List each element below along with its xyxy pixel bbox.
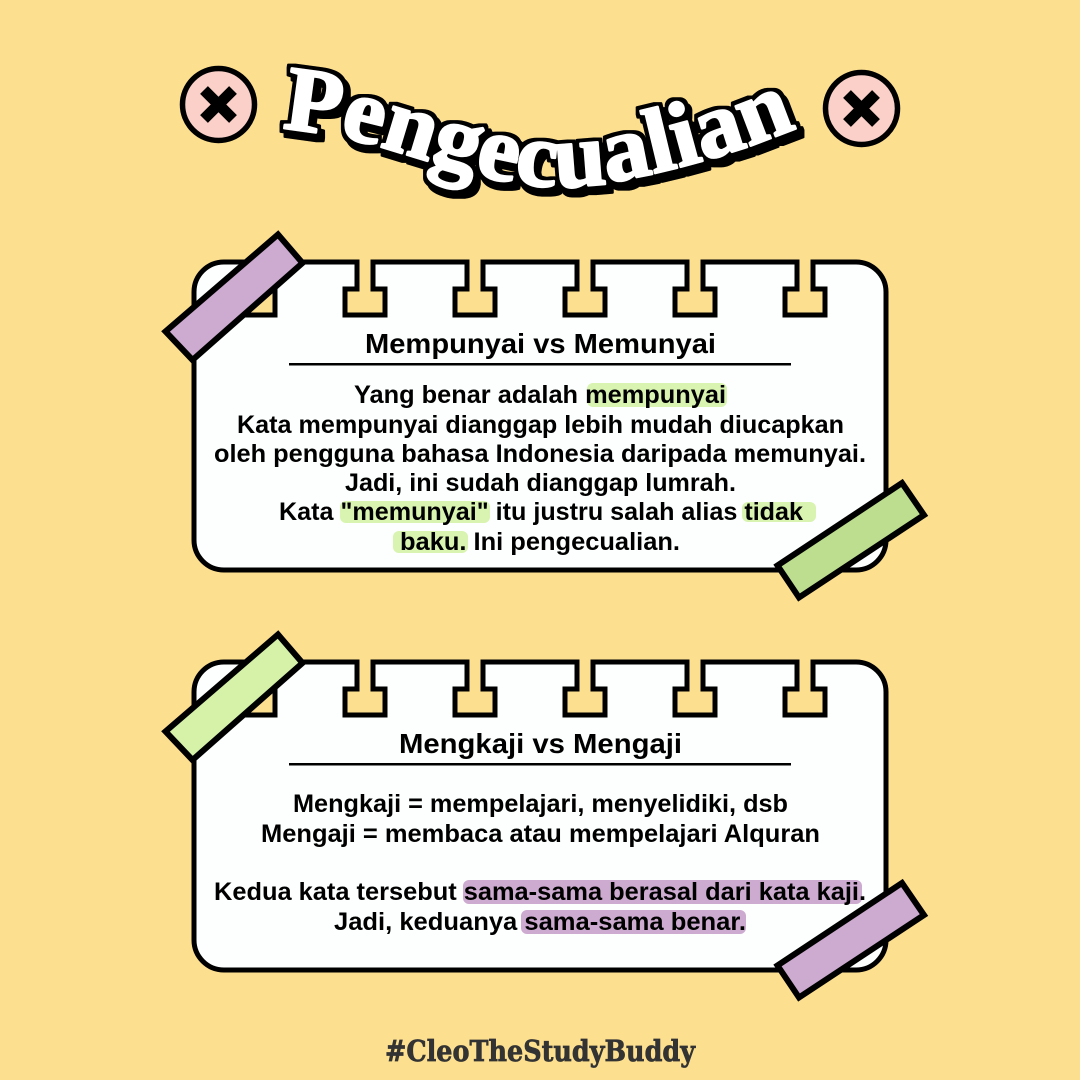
hashtag footer: #CleoTheStudyBuddy [385,1034,696,1068]
body text: Jadi, ini sudah dianggap lumrah. [345,469,736,497]
heading: Mengkaji vs Mengaji [399,728,682,759]
heading: Mempunyai vs Memunyai [365,328,716,359]
heading rule [289,763,791,766]
body text: Kata mempunyai dianggap lebih mudah diucapkan [237,411,844,439]
icon: left cross badge [182,68,254,140]
card shape with binder notches [194,662,886,970]
body text [214,381,866,556]
tape: purple top left [166,234,302,360]
body text: Mengkaji = mempelajari, menyelidiki, dsb [293,790,788,818]
body text: Mengaji = membaca atau mempelajari Alquran [261,820,820,848]
title: Pengecualian [280,64,804,199]
body text [214,790,866,936]
body text: Kata "memunyai" itu justru salah alias tidak [279,498,803,526]
body text: Jadi, keduanya sama-sama benar. [334,908,746,936]
heading rule [289,363,791,366]
tape: purple bottom right [778,883,924,998]
card shape with binder notches [194,262,886,570]
body text: Kedua kata tersebut sama-sama berasal dari kata kaji. [214,878,866,906]
tape: green bottom right [778,483,924,598]
highlights [463,880,862,934]
panel: mempunyai vs memunyai [194,262,886,570]
icon: right cross badge [826,72,898,144]
body text: baku. Ini pengecualian. [400,528,680,556]
body text: oleh pengguna bahasa Indonesia daripada memunyai. [214,440,866,468]
body text: Yang benar adalah mempunyai [354,381,726,409]
panel: mengkaji vs mengaji [194,662,886,970]
highlights [340,383,816,553]
tape: light green top left [166,634,302,760]
